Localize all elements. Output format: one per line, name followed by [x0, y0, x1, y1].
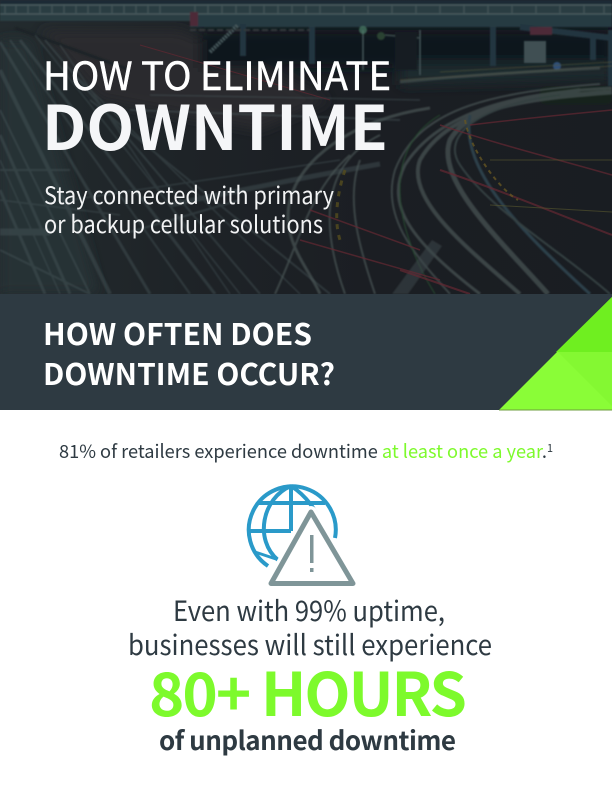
big number: 80+ hours: 80+ HOURS — [149, 647, 467, 734]
yellow road edge — [465, 120, 518, 200]
subtitle: or backup cellular solutions — [44, 205, 323, 240]
banner heading: HOW OFTEN DOES — [43, 310, 312, 354]
banner heading — [43, 310, 335, 394]
uptime text: businesses will still experience — [128, 624, 492, 664]
uptime text — [128, 590, 492, 664]
statistic sentence: 81% of retailers experience downtime at least once a year. — [59, 438, 547, 464]
uptime text: Even with 99% uptime, — [173, 590, 445, 630]
panel: header road photo — [0, 0, 612, 294]
icon: globe with warning triangle — [248, 486, 353, 584]
subtitle: Stay connected with primary — [44, 176, 334, 211]
statistic sentence: 1 — [547, 440, 553, 456]
icon: globe — [248, 486, 336, 566]
bridge and pillars — [0, 0, 612, 5]
title — [42, 46, 391, 168]
light trails: left fan — [0, 35, 420, 294]
light trails: curves — [275, 84, 612, 294]
red trails — [140, 45, 612, 294]
panel: dark banner — [0, 294, 612, 410]
banner heading: DOWNTIME OCCUR? — [43, 350, 335, 394]
title line: downtime: DOWNTIME — [42, 79, 388, 168]
subtitle — [44, 176, 334, 240]
closing text: of unplanned downtime — [159, 721, 456, 758]
icon: warning triangle — [271, 512, 353, 584]
green triangle accent — [499, 297, 612, 410]
title line: how to eliminate: HOW TO ELIMINATE — [43, 46, 391, 102]
